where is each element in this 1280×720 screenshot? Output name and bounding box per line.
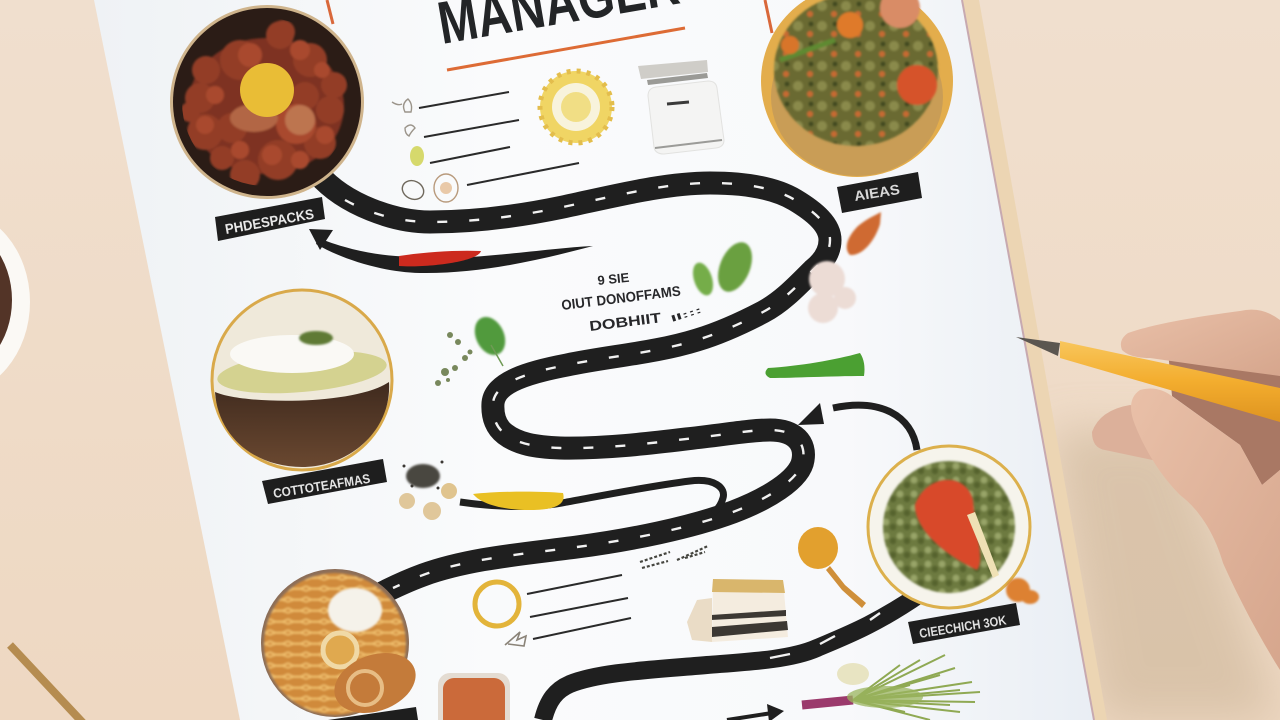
icon: white jar bbox=[638, 60, 724, 154]
icon: small pin bbox=[505, 632, 526, 646]
icons: small spices bbox=[392, 99, 458, 203]
label: soup bbox=[262, 459, 387, 504]
thumb and wrist bbox=[1131, 389, 1280, 670]
side bowl at left edge bbox=[0, 208, 30, 396]
label: bottom right bbox=[908, 603, 1020, 644]
lines bbox=[419, 92, 579, 185]
icon: green herb leaves bbox=[689, 237, 759, 298]
food photo: noodle pan bbox=[261, 569, 424, 720]
icon: sauce dish bbox=[438, 673, 510, 720]
label: top left: PHDESPACKS bbox=[224, 206, 315, 237]
center caption bbox=[560, 270, 703, 334]
center caption: II::: bbox=[670, 305, 703, 324]
paper edge line bbox=[962, 0, 1094, 720]
label: top right bbox=[837, 172, 922, 213]
icon: fennel herb bbox=[802, 655, 980, 720]
clipboard edge bbox=[961, 0, 1107, 720]
food photo: soup bowl bbox=[212, 290, 392, 470]
icon: ring bbox=[475, 582, 519, 626]
label: soup: COTTOTEAFMAS bbox=[272, 471, 372, 501]
label: top left bbox=[215, 197, 325, 241]
title: frame accents bbox=[327, 0, 772, 33]
food photo: vegetable platter top right bbox=[761, 0, 953, 177]
center caption: 9 SIE bbox=[597, 270, 630, 288]
chopstick bottom left bbox=[10, 645, 84, 720]
icon: green chili bbox=[765, 353, 864, 378]
food photo: braised meat bowl bbox=[170, 5, 364, 199]
hand shadow on clipboard bbox=[1050, 430, 1280, 720]
title underline bbox=[447, 28, 685, 70]
icon: yellow sunburst bbox=[540, 71, 612, 143]
center caption: OIUT DONOFFAMS bbox=[560, 282, 681, 313]
pencil bbox=[1016, 337, 1280, 422]
index finger bbox=[1121, 310, 1280, 376]
label: top right: AIEAS bbox=[853, 181, 901, 204]
center caption: DOBHIIT bbox=[588, 309, 662, 334]
arrow: curved to right bowl bbox=[798, 403, 917, 450]
icon: chili top right bbox=[847, 212, 881, 255]
icon: peppercorns and nuts bbox=[399, 460, 457, 520]
paper sheet bbox=[94, 0, 1094, 720]
icon: scattered seeds bbox=[640, 546, 708, 568]
icon: herb sprig bbox=[435, 312, 511, 386]
icon: orange spice pile bbox=[1006, 578, 1039, 604]
icon: garlic bbox=[808, 261, 856, 323]
middle finger bbox=[1092, 405, 1200, 470]
yolk bbox=[240, 63, 294, 117]
arrow: return under meat bowl bbox=[309, 229, 593, 273]
hand with pencil bbox=[1016, 310, 1280, 670]
label: bottom left bbox=[328, 707, 418, 720]
icon: layered cake bbox=[687, 579, 788, 642]
title block bbox=[327, 0, 772, 70]
arrow: yellow pepper curve bbox=[460, 480, 723, 513]
food photo: green rice bowl bbox=[868, 446, 1030, 608]
arrow: bottom bbox=[727, 704, 784, 720]
road: lower route bbox=[543, 594, 920, 720]
notes list top bbox=[392, 92, 579, 203]
palm bbox=[1168, 350, 1280, 485]
road: main winding route bbox=[318, 174, 920, 720]
icon: spice spoon bbox=[798, 527, 866, 608]
notes list bottom bbox=[475, 575, 631, 646]
label: bottom right: CIEECHICH 3OK bbox=[918, 612, 1008, 641]
